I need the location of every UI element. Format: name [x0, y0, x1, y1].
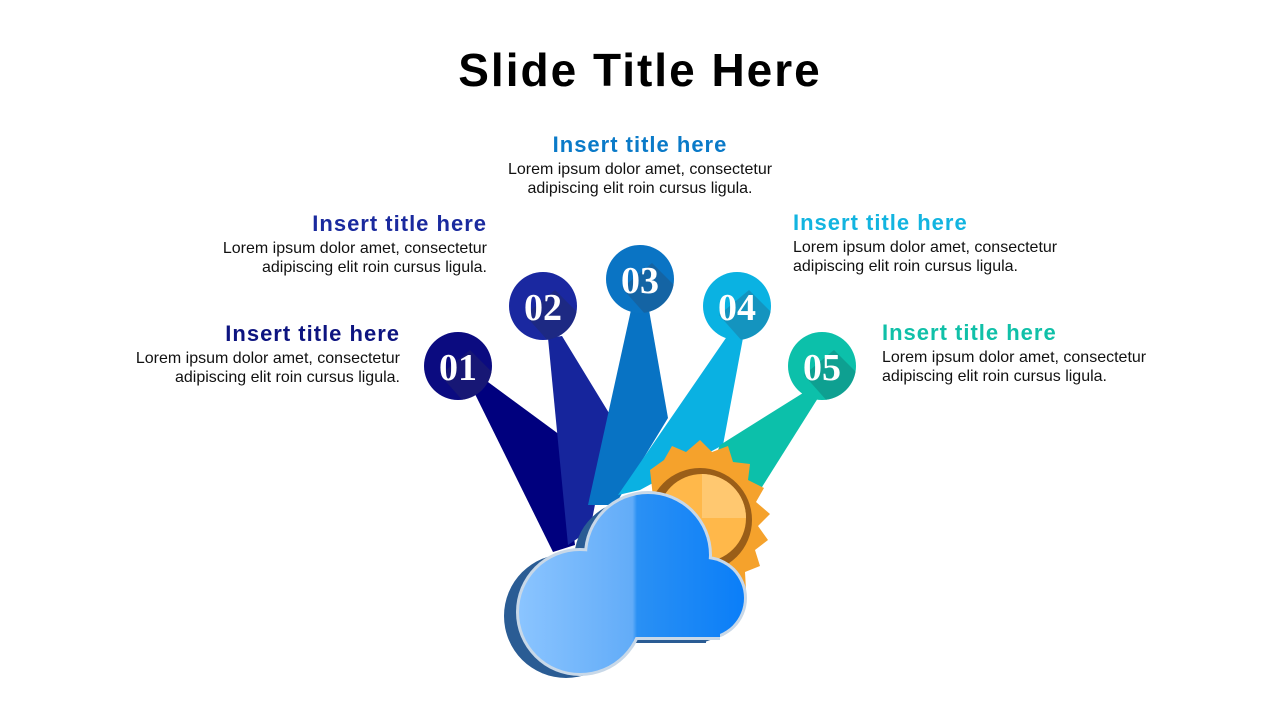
beam 01 — [474, 382, 575, 552]
circle 01: 01 — [439, 347, 477, 389]
text block 02 — [223, 211, 487, 276]
text block 05 — [882, 320, 1146, 385]
text block 01: Insert title here — [225, 321, 400, 346]
circle 03 — [606, 245, 674, 313]
diagram — [424, 245, 856, 678]
circle 05: 05 — [803, 347, 841, 389]
text block 02: adipiscing elit roin cursus ligula. — [262, 259, 487, 276]
text block 04: adipiscing elit roin cursus ligula. — [793, 258, 1018, 275]
text block 02: Insert title here — [312, 211, 487, 236]
beam 02 — [548, 336, 612, 545]
beam 03 — [588, 310, 668, 505]
text block 01 — [136, 321, 400, 386]
text block 04: Insert title here — [793, 210, 968, 235]
text block 01: adipiscing elit roin cursus ligula. — [175, 369, 400, 386]
text block 03: Insert title here — [553, 132, 727, 157]
title: Slide Title Here — [458, 44, 822, 96]
beam 04 — [618, 335, 743, 495]
text block 03: adipiscing elit roin cursus ligula. — [528, 180, 752, 197]
circle 04: 04 — [718, 287, 756, 329]
text block 04: Lorem ipsum dolor amet, consectetur — [793, 239, 1057, 256]
text block 04 — [793, 210, 1057, 275]
circle 05 — [788, 332, 856, 400]
beam 05 — [710, 393, 818, 495]
text block 05: adipiscing elit roin cursus ligula. — [882, 368, 1107, 385]
text block 02: Lorem ipsum dolor amet, consectetur — [223, 240, 487, 257]
circle 01 — [424, 332, 492, 400]
text block 03: Lorem ipsum dolor amet, consectetur — [508, 161, 772, 178]
text block 05: Insert title here — [882, 320, 1057, 345]
icon: cloud — [504, 491, 747, 678]
text block 03 — [508, 132, 772, 197]
text block 01: Lorem ipsum dolor amet, consectetur — [136, 350, 400, 367]
circle 03: 03 — [621, 260, 659, 302]
circle 04 — [703, 272, 771, 340]
circle 02: 02 — [524, 287, 562, 329]
circle 02 — [509, 272, 577, 340]
icon: sun — [648, 440, 770, 600]
text block 05: Lorem ipsum dolor amet, consectetur — [882, 349, 1146, 366]
